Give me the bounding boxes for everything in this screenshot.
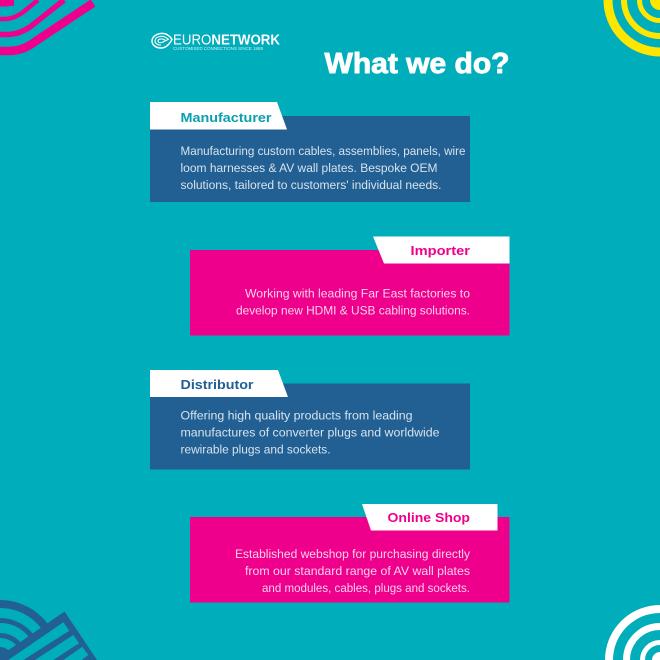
logo wordmark: EURONETWORK	[173, 32, 280, 48]
panel: Importer	[190, 236, 510, 336]
decoration: top-left pink stripes	[0, 0, 93, 51]
body text: Manufacturing custom cables, assemblies, panels, wire	[180, 144, 466, 158]
decoration: bottom-left blue rings and stripes	[0, 604, 97, 660]
title: What we do?	[324, 48, 510, 80]
logo tagline: CUSTOMISED CONNECTIONS SINCE 1989	[173, 46, 263, 51]
body text	[236, 286, 470, 318]
body text: Offering high quality products from leading	[180, 408, 413, 422]
panel background	[190, 517, 510, 602]
panel background	[150, 116, 470, 202]
body text: from our standard range of AV wall plates	[245, 564, 470, 578]
decoration: top-right yellow rings	[608, 0, 660, 52]
decoration: bottom-right white rings	[609, 609, 660, 660]
body text: develop new HDMI & USB cabling solutions.	[236, 304, 470, 318]
label tab	[373, 236, 510, 264]
panel: Distributor	[150, 370, 470, 470]
body text	[180, 144, 466, 192]
label tab	[150, 370, 288, 397]
body text	[180, 408, 440, 456]
body text: Working with leading Far East factories to	[245, 286, 470, 300]
body text: rewirable plugs and sockets.	[180, 442, 330, 456]
panel: Online Shop	[190, 504, 510, 602]
body text: solutions, tailored to customers' individual needs.	[180, 178, 442, 192]
body text: manufactures of converter plugs and worldwide	[180, 426, 440, 440]
panel: Manufacturer	[150, 102, 470, 202]
logo icon	[152, 33, 172, 48]
heading: Manufacturer	[180, 110, 272, 125]
label tab	[362, 504, 498, 530]
body text: and modules, cables, plugs and sockets.	[262, 581, 470, 595]
logo: Euronetwork	[152, 32, 280, 51]
heading: Online Shop	[388, 510, 470, 525]
panel background	[190, 250, 510, 336]
label tab	[150, 102, 287, 130]
body text	[235, 547, 471, 595]
heading: Distributor	[180, 377, 254, 392]
panel background	[150, 384, 470, 470]
heading: Importer	[410, 243, 470, 258]
body text: Established webshop for purchasing directly	[235, 547, 471, 561]
body text: loom harnesses & AV wall plates. Bespoke OEM	[180, 161, 438, 175]
